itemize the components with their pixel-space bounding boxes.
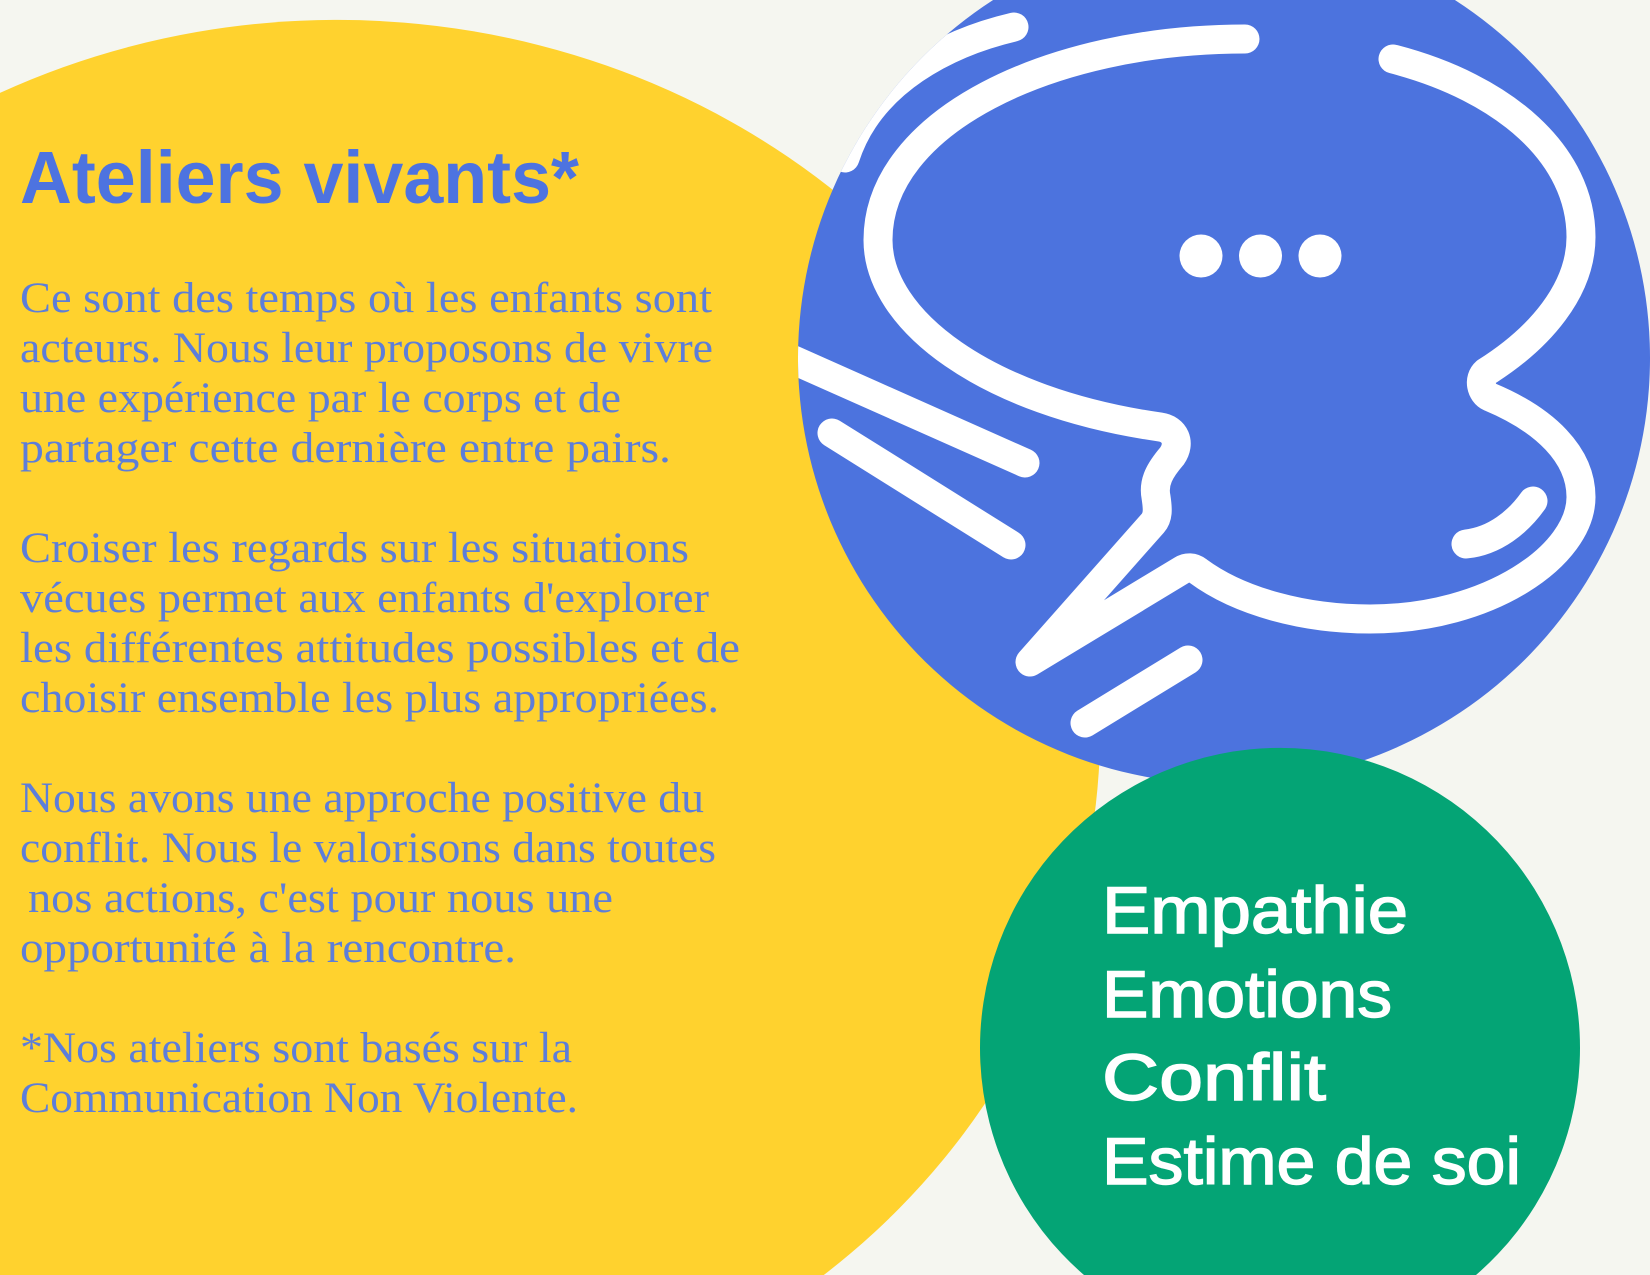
keyword list: Empathie [1102, 873, 1408, 947]
paragraph 3: opportunité à la rencontre. [20, 925, 516, 972]
icon: speech bubble outline [878, 39, 1581, 662]
paragraph 1: partager cette dernière entre pairs. [20, 425, 671, 472]
paragraph 1: une expérience par le corps et de [20, 375, 621, 422]
footnote: *Nos ateliers sont basés sur la [20, 1025, 572, 1072]
paragraph 3: conflit. Nous le valorisons dans toutes [20, 825, 716, 872]
title: Ateliers vivants* [20, 136, 579, 219]
icon: motion line 2 [832, 433, 1011, 545]
paragraph 3: nos actions, c'est pour nous une [28, 875, 613, 922]
paragraph 1: Ce sont des temps où les enfants sont [20, 275, 712, 322]
paragraph 2: Croiser les regards sur les situations [20, 525, 689, 572]
footnote [20, 1025, 578, 1122]
keyword list: Emotions [1102, 957, 1392, 1031]
background circle: blue [798, 0, 1650, 784]
icon: top-left arc [845, 27, 1014, 158]
paragraph 3 [20, 775, 716, 972]
paragraph 3: Nous avons une approche positive du [20, 775, 704, 822]
keyword list [1102, 873, 1521, 1198]
paragraph 1: acteurs. Nous leur proposons de vivre [20, 325, 713, 372]
footnote: Communication Non Violente. [20, 1075, 578, 1122]
paragraph 2: vécues permet aux enfants d'explorer [20, 575, 709, 622]
paragraph 2 [20, 525, 740, 722]
icon: three dots [1180, 234, 1342, 278]
icon: motion line 3 [1085, 660, 1188, 723]
background circle: yellow [0, 20, 1100, 1275]
paragraph 2: les différentes attitudes possibles et de [20, 625, 740, 672]
icon: speech bubble with motion lines [780, 27, 1581, 723]
paragraph 1 [20, 275, 713, 472]
keyword list: Estime de soi [1102, 1124, 1521, 1198]
keyword list: Conflit [1102, 1040, 1326, 1114]
icon: motion line 1 [780, 354, 1025, 463]
background circle: green [980, 748, 1580, 1275]
text block: description [20, 275, 740, 1122]
icon: inner small arc [1466, 501, 1533, 544]
paragraph 2: choisir ensemble les plus appropriées. [20, 675, 719, 722]
